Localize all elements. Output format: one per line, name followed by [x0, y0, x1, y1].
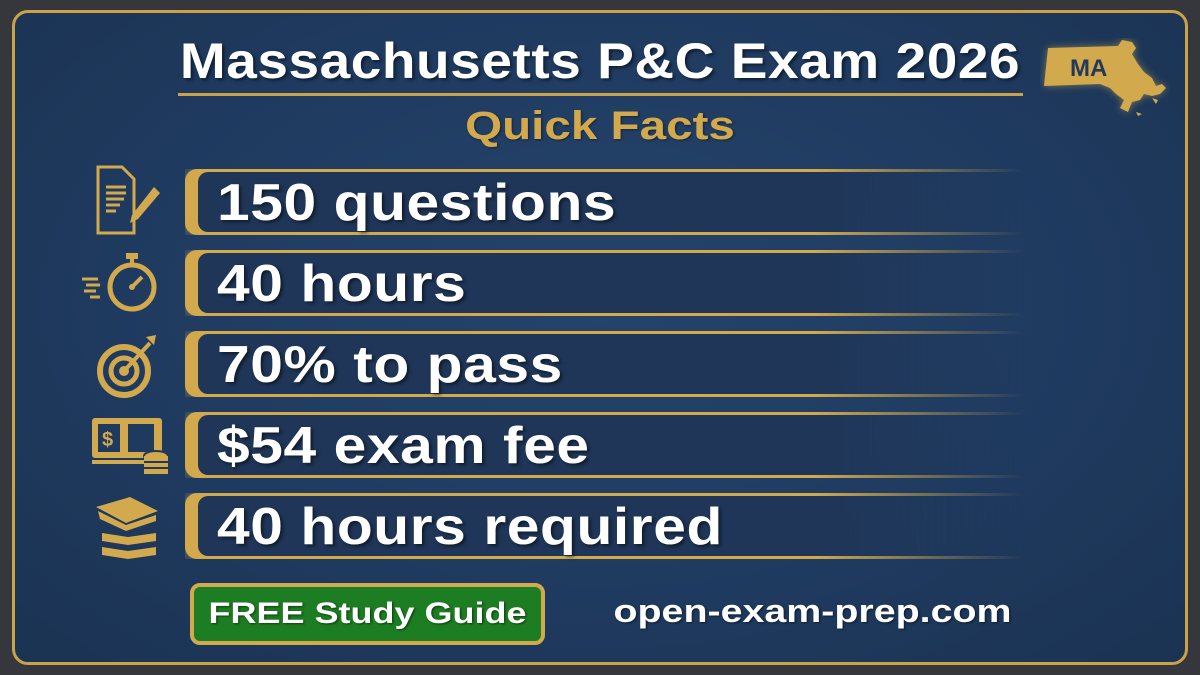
subtitle: Quick Facts [465, 104, 735, 148]
row: 40 hours: 40 hours [217, 255, 466, 313]
icon: target [97, 335, 156, 398]
icon: Massachusetts map [1040, 38, 1168, 116]
title underline [178, 93, 1023, 96]
icon: document with pencil [96, 166, 160, 234]
website url: open-exam-prep.com [613, 593, 1012, 629]
row: 40 hours [185, 250, 1014, 316]
row: 150 questions: 150 questions [217, 174, 616, 232]
icon: money and coins: $ [102, 429, 113, 451]
row: 40 hours required: 40 hours required [217, 498, 723, 556]
row: 70% to pass: 70% to pass [217, 336, 563, 394]
button: FREE Study Guide: FREE Study Guide [208, 597, 527, 630]
icon: stopwatch [82, 253, 156, 312]
row: 150 questions [185, 169, 1014, 235]
button: FREE Study Guide [190, 583, 545, 645]
row: $54 exam fee [185, 412, 1014, 478]
row: 70% to pass [185, 331, 1014, 397]
icon: money and coins [92, 418, 168, 474]
row: 40 hours required [185, 493, 1014, 559]
row: $54 exam fee: $54 exam fee [217, 417, 590, 475]
icon: books [96, 497, 158, 559]
icon: Massachusetts map: MA [1070, 55, 1107, 82]
title: Massachusetts P&C Exam 2026 [180, 33, 1020, 89]
